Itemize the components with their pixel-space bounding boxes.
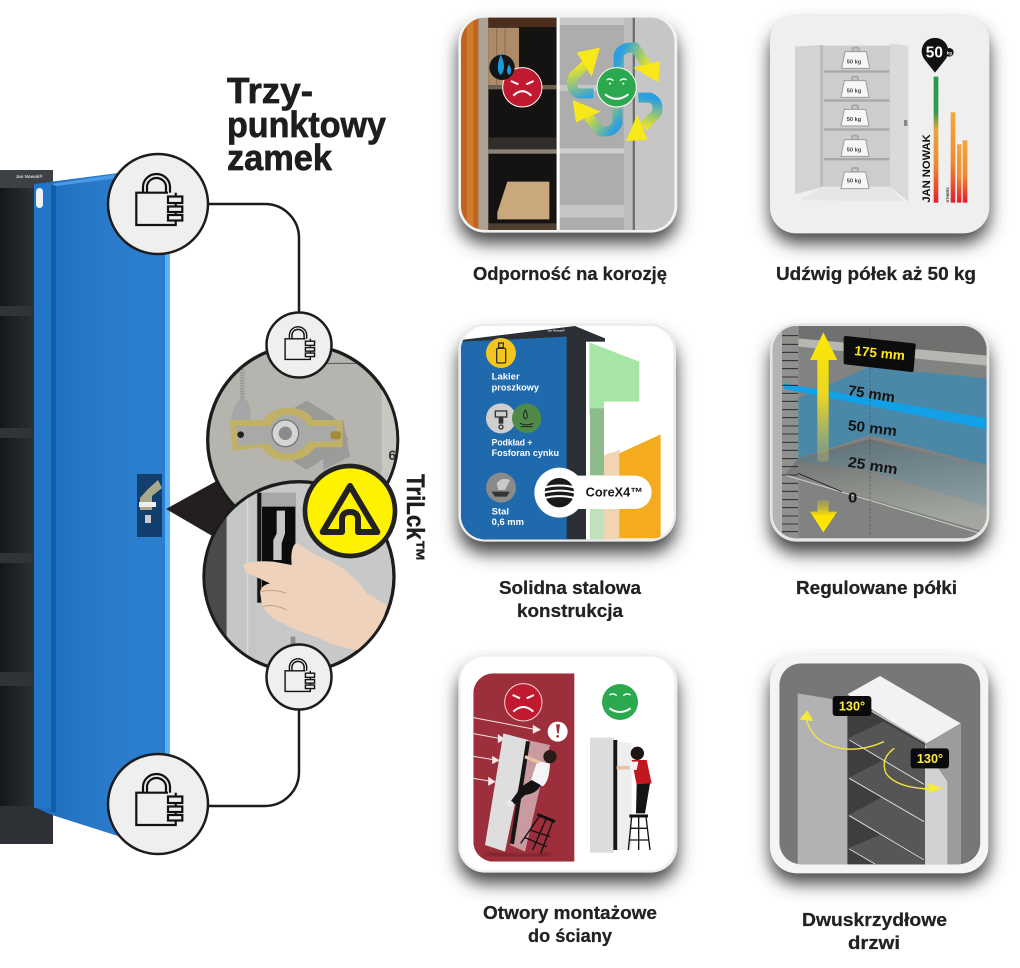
stool [628,816,650,850]
panel: shelf load [770,14,989,243]
shelf heights: 75 mm [847,383,896,406]
cabinet body interior [0,188,34,806]
text: powder coat: Lakier [492,371,520,381]
top [847,676,961,743]
left door [798,693,847,865]
icon: water drop [489,54,515,80]
text: primer: Podkład + [492,438,532,448]
caption: adjustable shelves: Regulowane półki [796,577,957,598]
connector line bottom [209,708,299,806]
shelf heights: 0 [848,491,857,507]
title: zamek [227,137,333,178]
icon: sad face [503,68,542,107]
icon: happy face [602,684,638,720]
shelf heights: 25 mm [847,455,899,478]
caption: steel construction: Solidna stalowa [499,577,642,598]
panel: steel construction [458,323,676,553]
icon: warning [548,722,568,742]
badge: left 130: 130° [839,700,865,714]
icon: steel [486,473,516,503]
panel: corrosion resistance [458,15,677,243]
icon: powder spray [486,338,516,368]
caption: double doors: Dwuskrzydłowe [802,909,947,930]
bar chart: JAN NOWAK [921,134,933,203]
caption: steel construction [499,577,642,621]
ruler ticks [782,336,798,532]
interior [847,695,925,865]
panel: wall mounting holes [458,654,677,883]
pointer triangle [166,478,240,537]
arrow up [810,332,837,462]
cabinet with weights: 50 kg [847,88,862,94]
force arrows [473,718,540,785]
bar chart: OTHERS [946,186,950,203]
cabinet with weights: 50 kg [847,148,862,154]
small lower lock icon [266,644,332,710]
caption: wall mounting: do ściany [528,925,613,946]
photo comparison [461,18,674,231]
text: steel [492,506,524,527]
top lock icon [108,154,208,254]
cabinet with blue door [0,170,170,844]
text: powder coat: proszkowy [492,382,539,392]
red panel [473,673,574,862]
icon: zinc phosphate [512,404,541,433]
text: steel: Stal [492,506,509,516]
title: Trzy- [227,70,313,111]
badge: 175 mm: 175 mm [854,343,906,363]
cabinet with weights: 50 kg [847,117,862,123]
standing figure [617,747,652,813]
caption: wall mounting: Otwory montażowe [483,902,657,923]
icon: primer brush [486,403,516,433]
shelf heights: 50 mm [847,418,898,440]
bottom lock icon [108,754,208,854]
caption: shelf load: Udźwig półek aż 50 kg [776,263,976,284]
text: primer: Fosforan cynku [492,448,559,458]
tipping cabinet [485,733,550,852]
upright cabinet [590,738,632,853]
panel: steel construction: Jan Nowak® [547,329,566,333]
cabinet plinth [0,806,53,844]
title [227,70,386,178]
TriLck label: TriLck™ [401,474,429,562]
badge: 175 mm [844,336,916,372]
caption: wall mounting [483,902,657,946]
cabinet with weights [795,43,908,202]
photo: cam lock: 6 [388,447,396,463]
50 kg pin: 50 [926,45,943,62]
caption: corrosion resistance: Odporność na korozję [473,263,667,284]
climbing figure [505,750,557,808]
text: primer [492,438,559,458]
small upper lock icon [266,312,332,378]
CoreX4 badge: CoreX4™ [586,486,643,500]
badge: left 130 [833,696,871,716]
cabinet with weights: 50 kg [847,59,862,65]
door lock cut-out [137,474,162,537]
cabinet top header: Jan Nowak® [16,173,43,179]
photo: hand on handle [200,482,394,672]
TriLck yellow badge [305,466,395,556]
caption: double doors [802,909,947,953]
badge: right 130: 130° [917,752,943,766]
cabinet with weights: 50 kg [847,178,862,184]
50 kg pin [922,38,954,73]
arrow down [810,500,837,532]
badge: right 130 [911,748,949,768]
icon: sad face [505,684,542,721]
panel: adjustable shelves [770,323,989,553]
opening arcs [807,720,932,789]
50 kg pin: kg [947,50,952,55]
caption: double doors: drzwi [848,932,900,953]
lock photos [200,340,402,672]
shelf heights [847,383,899,507]
layered material [586,342,606,540]
title: punktowy [227,104,386,145]
caption: steel construction: konstrukcja [517,600,624,621]
text: powder coat [492,371,539,392]
recycling arrows [572,48,657,131]
CoreX4 badge [534,468,652,518]
falling stool [521,814,555,853]
connector line top [209,204,299,315]
bar chart [921,77,967,203]
blue door [34,173,170,836]
text: steel: 0,6 mm [492,517,524,527]
panel: double doors [770,655,989,883]
icon: happy face [597,68,636,107]
right door [925,723,961,865]
cabinet top header [0,170,53,188]
photo: cam lock [206,348,400,504]
